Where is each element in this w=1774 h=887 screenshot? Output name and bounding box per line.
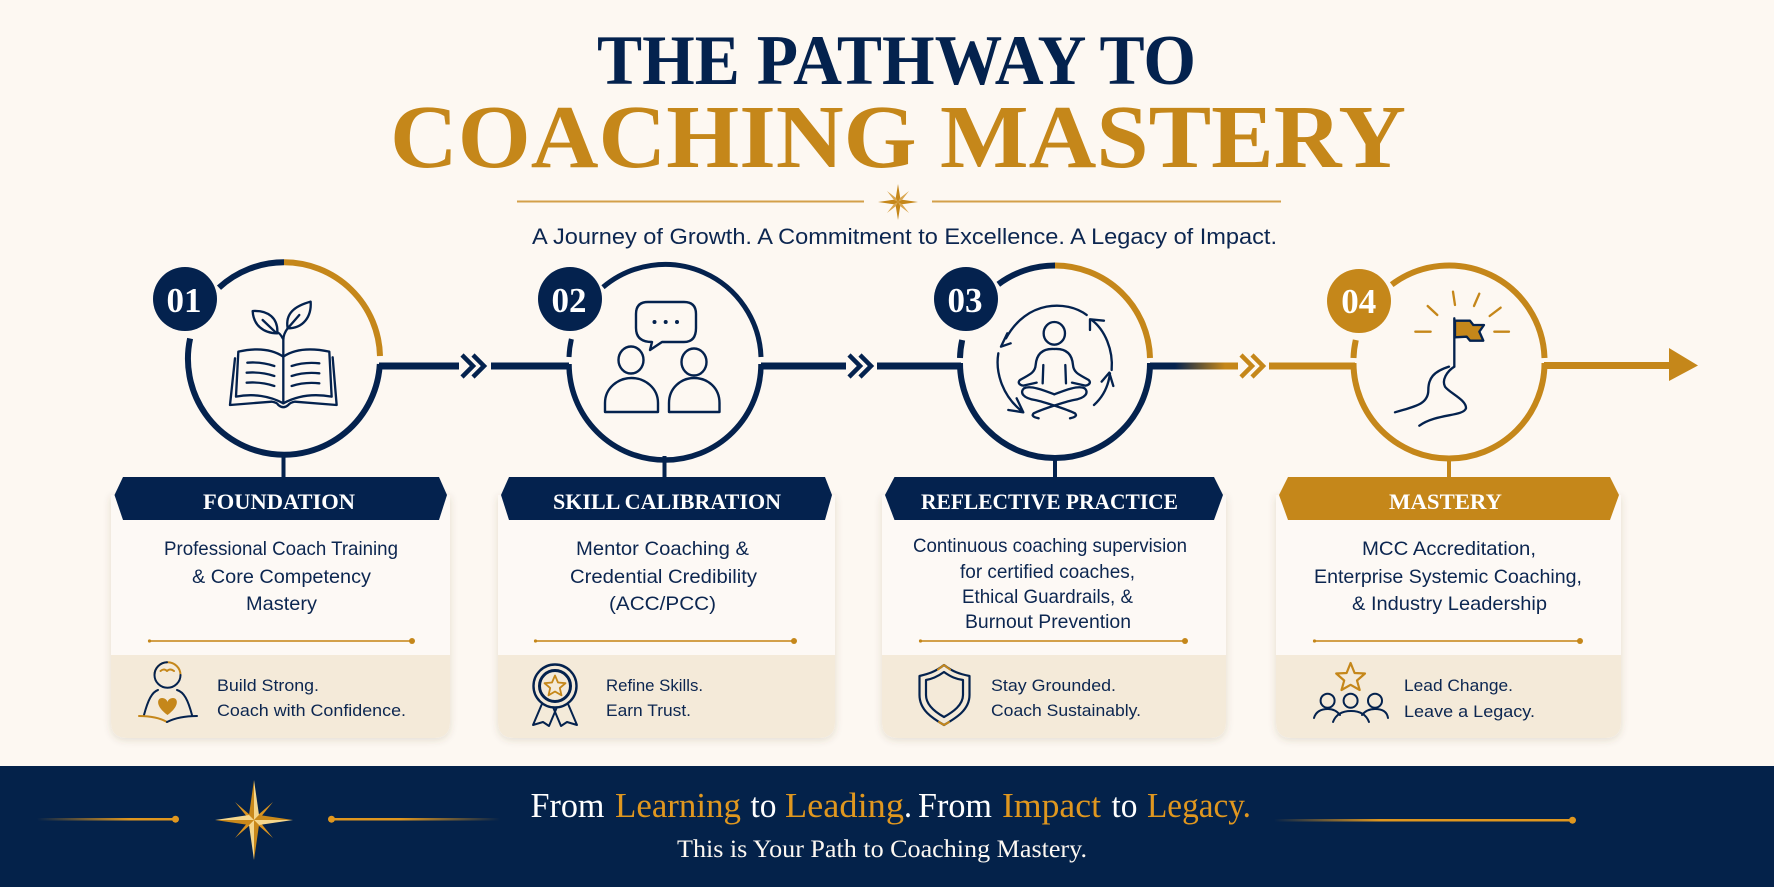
closing statement: From	[918, 787, 992, 825]
title divider with compass star	[517, 184, 1281, 220]
icon: award rosette	[533, 664, 577, 726]
banner	[1279, 477, 1619, 520]
footer line middle	[328, 816, 500, 823]
badge 01: 01	[166, 281, 202, 320]
banner: MASTERY	[1389, 489, 1502, 514]
takeaway	[1404, 676, 1535, 721]
badge 04	[1327, 269, 1391, 333]
banner: FOUNDATION	[203, 489, 355, 514]
panel: reflective practice	[882, 477, 1226, 738]
panel: mastery	[1276, 477, 1621, 738]
icon: meditating figure with cycle arrows	[998, 306, 1113, 418]
banner	[885, 477, 1223, 520]
icon: person with heart	[139, 662, 197, 722]
description: for certified coaches,	[960, 561, 1135, 583]
closing statement: Leading	[785, 787, 904, 825]
title	[390, 22, 1406, 187]
icon: open book with sprout	[230, 302, 337, 407]
takeaway	[606, 676, 703, 720]
takeaway: Leave a Legacy.	[1404, 702, 1535, 721]
closing statement: to	[1112, 787, 1138, 825]
closing subline: This is Your Path to Coaching Mastery.	[677, 836, 1087, 863]
divider	[534, 638, 797, 644]
description: Mentor Coaching &	[576, 538, 749, 560]
closing statement: to	[750, 787, 776, 825]
banner	[114, 477, 447, 520]
badge 03	[934, 267, 998, 331]
description: Ethical Guardrails, &	[962, 586, 1133, 608]
takeaway: Lead Change.	[1404, 676, 1513, 695]
takeaway	[217, 676, 406, 720]
description: & Core Competency	[192, 566, 371, 588]
takeaway: Earn Trust.	[606, 701, 691, 720]
description	[164, 538, 398, 615]
divider	[148, 638, 415, 644]
description	[913, 535, 1187, 633]
takeaway	[991, 676, 1141, 720]
icon: shield	[920, 665, 970, 725]
title: THE PATHWAY TO	[597, 22, 1196, 100]
closing statement: From	[530, 787, 605, 825]
step 02 ring	[569, 264, 761, 478]
badge 01	[153, 267, 217, 331]
banner	[501, 477, 832, 520]
panel: skill calibration	[498, 477, 835, 738]
takeaway: Build Strong.	[217, 676, 319, 695]
final arrow	[1544, 348, 1698, 381]
card body	[1276, 495, 1621, 738]
closing statement: Legacy.	[1147, 787, 1251, 825]
step 03 ring	[960, 266, 1150, 478]
banner: SKILL CALIBRATION	[553, 489, 781, 514]
card footer band	[1276, 655, 1621, 738]
title: COACHING MASTERY	[390, 88, 1406, 187]
closing statement: Impact	[1002, 787, 1101, 825]
card footer band	[111, 655, 450, 738]
description	[570, 538, 757, 615]
closing statement: Learning	[615, 787, 741, 825]
panel: foundation	[111, 477, 450, 738]
divider	[919, 638, 1188, 644]
tagline: A Journey of Growth. A Commitment to Excellence. A Legacy of Impact.	[532, 224, 1277, 249]
footer line right	[1274, 817, 1576, 824]
icon: star over team	[1314, 663, 1388, 722]
step 04 ring	[1354, 265, 1544, 478]
description: (ACC/PCC)	[609, 593, 716, 615]
connector arrow 3 to 4	[1150, 355, 1355, 377]
description	[1314, 538, 1582, 615]
description: Professional Coach Training	[164, 538, 398, 560]
badge 03: 03	[948, 281, 982, 320]
card body	[498, 495, 835, 738]
description: Continuous coaching supervision	[913, 535, 1187, 557]
description: Burnout Prevention	[965, 611, 1131, 633]
connector arrow 2 to 3	[761, 355, 961, 377]
footer line left	[37, 816, 179, 823]
description: Mastery	[246, 593, 317, 615]
takeaway: Stay Grounded.	[991, 676, 1116, 695]
icon: footer compass star	[215, 780, 293, 860]
divider	[1313, 638, 1583, 644]
badge 04: 04	[1341, 282, 1376, 321]
takeaway: Coach with Confidence.	[217, 701, 406, 720]
takeaway: Coach Sustainably.	[991, 701, 1141, 720]
description: Credential Credibility	[570, 566, 757, 588]
step 01 ring	[188, 262, 380, 478]
card body	[882, 495, 1226, 738]
icon: two people talking	[605, 302, 720, 412]
description: Enterprise Systemic Coaching,	[1314, 566, 1582, 588]
card body	[111, 495, 450, 738]
card footer band	[882, 655, 1226, 738]
closing statement: .	[904, 787, 912, 825]
badge 02: 02	[552, 281, 586, 320]
connector arrow 1 to 2	[379, 355, 569, 377]
description: MCC Accreditation,	[1362, 538, 1536, 560]
banner: REFLECTIVE PRACTICE	[921, 489, 1178, 514]
badge 02	[538, 267, 602, 331]
icon: flag on winding path	[1395, 292, 1509, 426]
card footer band	[498, 655, 835, 738]
footer band	[0, 766, 1774, 887]
description: & Industry Leadership	[1352, 593, 1547, 615]
takeaway: Refine Skills.	[606, 676, 703, 695]
